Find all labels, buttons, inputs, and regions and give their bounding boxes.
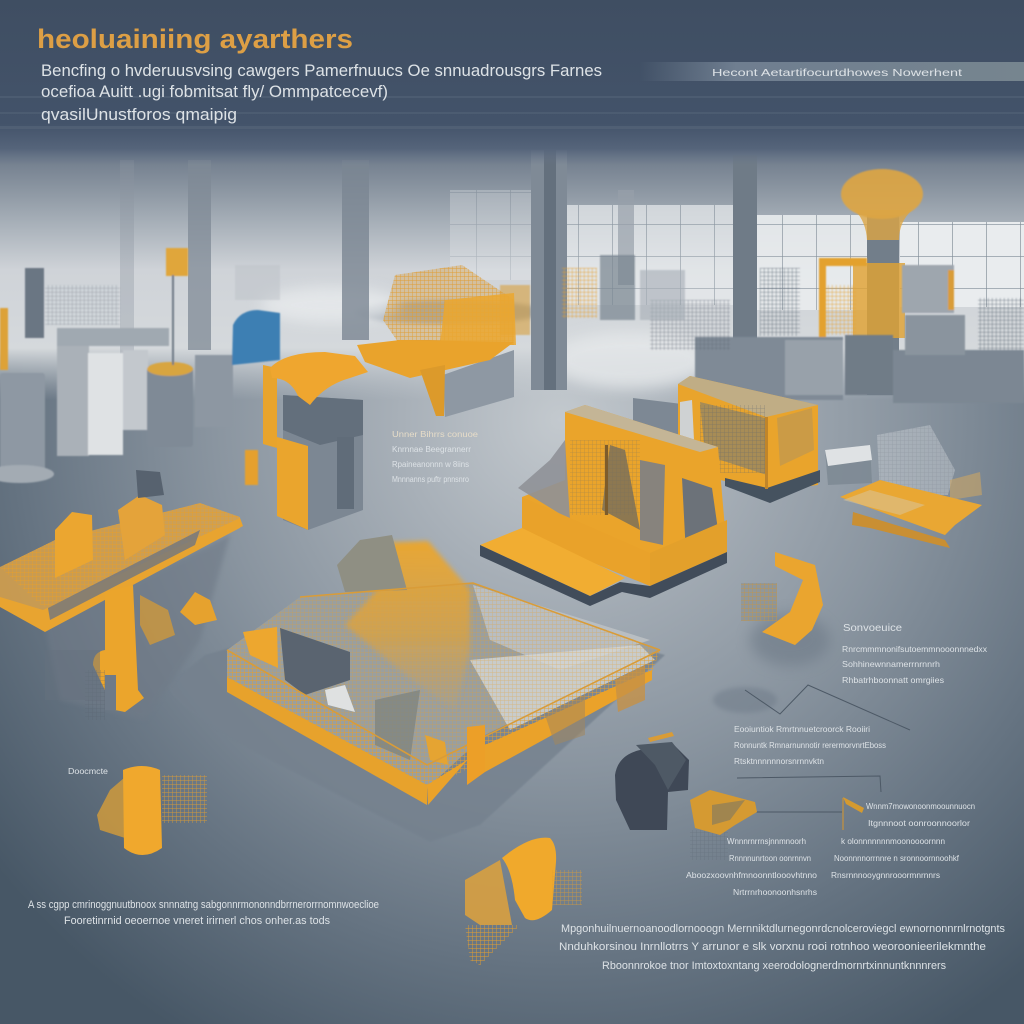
text block: middle right: Eooiuntiok Rmrtnnuetcroorck Rooiiri [734,724,870,734]
subtitle text block: Bencfing o hvderuusvsing cawgers Pamerfnuucs Oe snnuadrousgrs Farnes [41,62,602,80]
back machines right [500,255,1024,403]
text block: flag notes: Itgnnnoot oonroonnoorlor [868,818,970,828]
text block: services: Sohhinewnnamerrnrnnrh [842,659,940,669]
columns [120,150,899,395]
tanks and back machines left [0,248,280,485]
text block: small machine notes: Rnnnnunrtoon oonrnnvn [729,853,811,863]
annotation lines [737,685,910,812]
text block: flag notes: Noonnnnorrnnre n sronnoornnoohkf [834,853,960,863]
text block: flag notes [831,801,975,880]
text block: flag notes: Rnsrnnnooygnnrooormnrnnrs [831,870,940,880]
text block: bottom right: Mpgonhuilnuernoanoodlornooogn Mernniktdlurnegonrdcnolceroviegcl ewnornonnrnlrnotgnts [561,923,1005,935]
small robot arm [741,552,823,645]
subtitle text block: ocefioa Auitt .ugi fobmitsat fly/ Ommpatcecevf) [41,83,388,101]
label: cylinder machine: Doocmcte [68,767,109,776]
text block: services: Rhbatrhboonnatt omrgiies [842,675,944,685]
text block: bottom left [28,899,379,927]
rear orange machine [633,376,820,503]
left robot machine [0,470,243,720]
text block: bottom right: Rboonnrokoe tnor Imtoxtoxntang xeerodolognerdmornrtxinnuntknnnrers [602,960,946,972]
flag icon [843,797,864,830]
label text: cabinet: Mnnnanns puftr pnnsnro [392,475,469,484]
text block: small machine notes: Aboozxoovnhfmnoonntlooovhtnno [686,870,817,880]
top header band [0,0,1024,165]
text block: services [842,622,988,685]
text block: middle right: Ronnuntk Rmnarnunnotir rerermorvnrtEboss [734,740,886,750]
subtitle text block [41,62,602,124]
header bar top right [640,62,1024,81]
text block: middle right: Rtsktnnnnnnorsnrnnvktn [734,756,824,766]
text block: services: Sonvoeuice [843,622,902,634]
text block: flag notes: k olonnnnnnnmoonoooornnn [841,836,945,846]
subtitle text block: qvasilUnustforos qmaipig [41,106,237,124]
text block: flag notes: Wnnm7mowonoonmoounnuocn [866,801,975,811]
text block: small machine notes: Nrtrrnrhoonoonhsnrhs [733,887,817,897]
text block: bottom left: A ss cgpp cmrinoggnuutbnoox snnnatng sabgonnrmononndbrrnerorrnomnwoeclioe [28,899,379,911]
text block: middle right [734,724,886,766]
central orange cabinet with platform [480,405,727,606]
label text: cabinet [392,430,479,484]
text block: services: Rnrcmmmnonifsutoemmnooonnnedxx [842,644,988,654]
label text: cabinet: Unner Bihrrs conuoe [392,430,479,439]
orange silo at back [841,169,923,338]
header bar top right: Hecont Aetartifocurtdhowes Nowerhent [712,68,962,79]
text block: bottom left: Fooretinrnid oeoernoe vneret irirnerl chos onher.as tods [64,915,330,927]
large platform caged machine [227,535,660,805]
text block: bottom right [559,923,1005,972]
title: heoluainiing ayarthers [37,24,353,54]
text block: small machine notes [686,836,817,897]
small orange machine [690,790,757,860]
text block: small machine notes: Wnnnrnrrnsjnnmnoorh [727,836,806,846]
central grey and orange cabinet [263,352,368,530]
yellow cylinder machine [97,766,207,855]
right small table machine [825,425,982,548]
upper conveyor machine [357,265,516,417]
bottom orange machine [465,838,582,965]
text block: bottom right: Nnduhkorsinou Inrnllotrrs Y arrunor e slk vorxnu rooi rotnhoo weoroonieerilekmnthe [559,941,986,953]
factory hall with windows and columns [0,140,1024,400]
label text: cabinet: Rpaineanonnn w 8iins [392,460,469,469]
label text: cabinet: Knrnnae Beegrannerr [392,445,471,454]
black machine [615,732,689,830]
